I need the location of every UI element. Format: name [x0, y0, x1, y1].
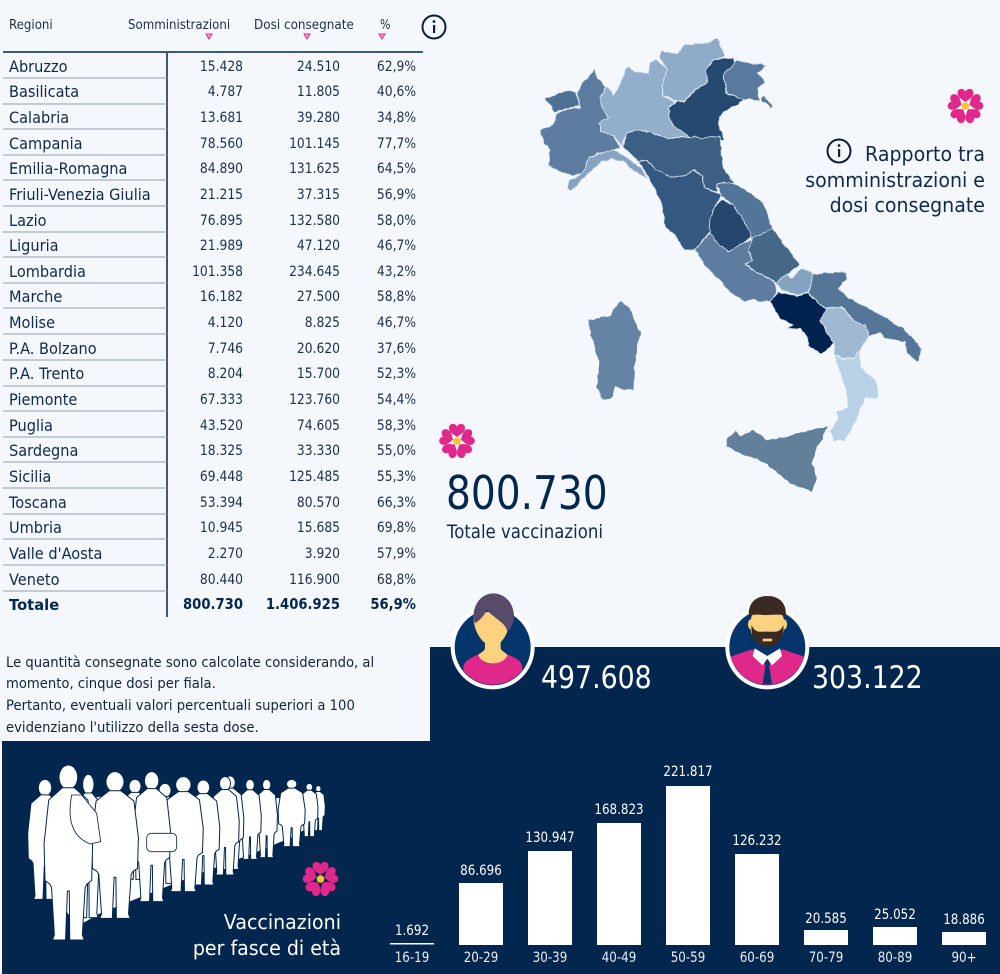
region: Umbria — [709, 200, 752, 252]
table row: Sardegna — [3, 441, 416, 462]
region: Veneto — [668, 57, 745, 140]
bar chart: vaccinations by age — [390, 764, 986, 966]
region: Lazio — [695, 233, 777, 302]
bar: 30-39: 130.947 — [525, 830, 575, 846]
map caption — [805, 140, 985, 217]
bar: 30-39: 30-39 — [533, 950, 567, 966]
map caption: Rapporto tra — [865, 142, 985, 166]
table row: Molise: 8.825 — [305, 315, 340, 331]
table row: P.A. Bolzano: 20.620 — [297, 341, 340, 357]
table row: Sardegna: 33.330 — [297, 443, 340, 459]
table row: Veneto: 80.440 — [200, 572, 243, 588]
bar: 80-89: 80-89 — [878, 950, 912, 966]
region: Piemonte — [539, 68, 620, 175]
bar: 16-19: 1.692 — [395, 923, 429, 939]
bar: 80-89: 25.052 — [874, 907, 916, 923]
region: Valle d'Aosta — [544, 91, 579, 113]
table row: Umbria: 10.945 — [200, 520, 243, 536]
table row: Campania — [3, 134, 416, 155]
table row: Lazio: Lazio — [9, 211, 47, 230]
table row: Calabria: 34,8% — [377, 110, 416, 126]
region: Toscana — [638, 161, 722, 250]
table row: Emilia-Romagna: 64,5% — [377, 161, 416, 177]
table row: Veneto: Veneto — [9, 570, 60, 589]
table row: Marche: 27.500 — [297, 289, 340, 305]
table row: Sicilia — [3, 467, 416, 488]
bar: 70-79: 20.585 — [805, 911, 847, 927]
total vaccinations: Totale vaccinazioni — [446, 522, 603, 543]
illustration: queue of people — [28, 765, 325, 940]
region: Trieste — [761, 97, 773, 107]
table row: Toscana: 66,3% — [377, 495, 416, 511]
table row: Sicilia: 125.485 — [289, 469, 340, 485]
table row: Molise — [3, 313, 416, 334]
table header — [3, 16, 423, 617]
table row: P.A. Bolzano: 7.746 — [208, 341, 243, 357]
bar: 90+: 90+ — [951, 950, 977, 966]
region: Calabria — [830, 350, 878, 441]
region: Sicilia — [727, 427, 828, 492]
table header: % — [380, 17, 390, 32]
bar: 70-79: 70-79 — [809, 950, 843, 966]
bar: 20-29: 20-29 — [464, 950, 498, 966]
bar: 70-79 — [804, 911, 848, 966]
table row: Piemonte: 67.333 — [200, 392, 243, 408]
age panel title: per fasce di età — [193, 937, 341, 960]
table row: Piemonte: 54,4% — [377, 392, 416, 408]
northern and central regions — [539, 38, 773, 252]
table row: Basilicata — [3, 82, 416, 104]
table row: Veneto: 68,8% — [377, 572, 416, 588]
table header: Somministrazioni — [128, 16, 230, 32]
table row: Sardegna: Sardegna — [9, 441, 78, 460]
region: Marche — [717, 182, 773, 238]
table row: Sicilia: Sicilia — [9, 467, 51, 486]
map of Italy — [539, 38, 922, 492]
table row: P.A. Trento: 52,3% — [377, 366, 416, 382]
table row: Valle d'Aosta: 2.270 — [208, 546, 243, 562]
region: Trentino-Alto Adige — [660, 38, 725, 102]
table row: Sardegna: 55,0% — [377, 443, 416, 459]
table row: Toscana: Toscana — [8, 493, 67, 512]
navy background band — [2, 647, 1000, 974]
table row: Puglia — [3, 416, 416, 437]
table row: Abruzzo: Abruzzo — [9, 57, 68, 76]
note text — [6, 654, 374, 736]
bar: 20-29: 86.696 — [460, 863, 502, 879]
icon: info — [422, 16, 446, 38]
table row: Abruzzo: 15.428 — [200, 59, 243, 75]
table row: Lombardia: Lombardia — [9, 262, 86, 281]
note text: Le quantità consegnate sono calcolate considerando, al — [6, 654, 374, 671]
icon: info — [828, 140, 850, 162]
table row: Liguria: 46,7% — [377, 238, 416, 254]
table row: Toscana — [3, 493, 416, 514]
bar: 40-49: 168.823 — [594, 802, 644, 818]
table row: Basilicata: 11.805 — [297, 84, 340, 100]
table row: Valle d'Aosta: Valle d'Aosta — [9, 544, 102, 563]
region: Lombardia — [599, 60, 690, 147]
bar: 60-69: 60-69 — [740, 950, 774, 966]
table row: Lazio: 58,0% — [377, 213, 416, 229]
region: Basilicata — [820, 307, 868, 358]
table row: Molise: 4.120 — [208, 315, 243, 331]
table row: Emilia-Romagna: 84.890 — [200, 161, 243, 177]
bar: 50-59: 221.817 — [663, 764, 713, 780]
table row: Calabria — [3, 108, 416, 129]
table row: Marche: Marche — [9, 287, 62, 306]
table row: Sicilia: 55,3% — [377, 469, 416, 485]
note text: Pertanto, eventuali valori percentuali superiori a 100 — [6, 697, 355, 714]
bar: 40-49: 40-49 — [602, 950, 636, 966]
note text: evidenziano l'utilizzo della sesta dose. — [6, 719, 259, 736]
table row: Lombardia — [3, 262, 416, 283]
table row: Campania: 77,7% — [377, 136, 416, 152]
bar: 90+: 18.886 — [943, 912, 985, 928]
table row: Puglia: 74.605 — [297, 418, 340, 434]
woman count: 497.608 — [541, 659, 652, 696]
table row: Calabria: 13.681 — [200, 110, 243, 126]
region: Abruzzo — [745, 229, 800, 282]
table row: Umbria — [3, 518, 416, 539]
bar: 16-19 — [390, 923, 434, 966]
table row: Veneto — [3, 570, 416, 591]
table row: Campania: 78.560 — [200, 136, 243, 152]
bar: 20-29 — [459, 863, 503, 966]
man avatar — [725, 596, 809, 689]
icon: flower top right — [947, 89, 984, 125]
bar: 60-69: 126.232 — [732, 833, 782, 849]
table row: Totale: Totale — [9, 596, 59, 614]
region: Molise — [777, 267, 813, 295]
man count: 303.122 — [812, 659, 923, 696]
region: Campania — [770, 292, 833, 354]
table row: Friuli-Venezia Giulia: 56,9% — [377, 187, 416, 203]
table row: Liguria — [3, 236, 416, 257]
table row: Basilicata: Basilicata — [9, 82, 79, 101]
map caption: somministrazioni e — [805, 168, 985, 192]
table row: Abruzzo: 62,9% — [377, 59, 416, 75]
table row: Puglia: Puglia — [9, 416, 53, 435]
table row: Friuli-Venezia Giulia: Friuli-Venezia Giulia — [9, 185, 151, 204]
table row: P.A. Bolzano: 37,6% — [377, 341, 416, 357]
table row: Valle d'Aosta: 57,9% — [377, 546, 416, 562]
table row: Friuli-Venezia Giulia: 37.315 — [297, 187, 340, 203]
table row: Lombardia: 43,2% — [377, 264, 416, 280]
table row: Friuli-Venezia Giulia: 21.215 — [200, 187, 243, 203]
bar: 16-19: 16-19 — [395, 950, 429, 966]
table row: Friuli-Venezia Giulia — [3, 185, 416, 206]
table row: Umbria: 69,8% — [377, 520, 416, 536]
region: Liguria — [567, 149, 648, 190]
table row: P.A. Bolzano — [3, 339, 416, 360]
table header: Regioni — [9, 16, 53, 32]
table row: Lazio: 132.580 — [289, 213, 340, 229]
table row: P.A. Bolzano: P.A. Bolzano — [9, 339, 97, 358]
table row: Marche: 58,8% — [377, 289, 416, 305]
table row: Totale: 800.730 — [183, 596, 243, 613]
table row: Lombardia: 234.645 — [289, 264, 340, 280]
data table — [3, 16, 446, 617]
table row: Piemonte — [3, 390, 416, 411]
table row: Umbria: Umbria — [9, 518, 62, 537]
table row: Calabria: 39.280 — [297, 110, 340, 126]
table row: Totale: 1.406.925 — [266, 596, 340, 613]
table row: Calabria: Calabria — [9, 108, 69, 127]
table row: Sicilia: 69.448 — [200, 469, 243, 485]
bar: 50-59 — [663, 764, 713, 966]
bar: 40-49 — [594, 802, 644, 966]
table row: Veneto: 116.900 — [289, 572, 340, 588]
table row: Lazio — [3, 211, 416, 232]
region: Sardegna — [588, 302, 640, 400]
age panel title — [193, 911, 341, 960]
table row: Molise: 46,7% — [377, 315, 416, 331]
region: Friuli-Venezia Giulia — [723, 61, 767, 102]
table row: Molise: Molise — [9, 313, 55, 332]
bar: 30-39 — [525, 830, 575, 966]
table row: Emilia-Romagna: Emilia-Romagna — [9, 159, 127, 178]
table row: Abruzzo: 24.510 — [297, 59, 340, 75]
table row: Toscana: 80.570 — [297, 495, 340, 511]
bar: 50-59: 50-59 — [671, 950, 705, 966]
table header: Dosi consegnate — [254, 17, 354, 32]
table row: Liguria: 21.989 — [200, 238, 243, 254]
table row: Toscana: 53.394 — [200, 495, 243, 511]
table row: Emilia-Romagna — [3, 159, 416, 180]
table row: Totale — [9, 596, 416, 614]
table row: P.A. Trento: 8.204 — [208, 366, 243, 382]
table row: Sardegna: 18.325 — [200, 443, 243, 459]
table row: P.A. Trento: 15.700 — [297, 366, 340, 382]
table row: Totale: 56,9% — [370, 596, 416, 613]
table row: Puglia: 58,3% — [377, 418, 416, 434]
table row: Valle d'Aosta: 3.920 — [305, 546, 340, 562]
woman avatar — [451, 593, 535, 689]
table row: P.A. Trento: P.A. Trento — [9, 364, 84, 383]
total vaccinations: 800.730 — [446, 467, 608, 521]
table row: Abruzzo — [3, 57, 416, 78]
table row: Campania: 101.145 — [289, 136, 340, 152]
table row: Valle d'Aosta — [3, 544, 416, 565]
icon: flower in age panel — [302, 862, 339, 898]
table row: Marche: 16.182 — [200, 289, 243, 305]
table row: Campania: Campania — [9, 134, 83, 153]
table row: Piemonte: 123.760 — [289, 392, 340, 408]
table row: Puglia: 43.520 — [200, 418, 243, 434]
bar: 80-89 — [873, 907, 917, 966]
bar: 90+ — [942, 912, 986, 966]
table row: Basilicata: 40,6% — [377, 84, 416, 100]
map caption: dosi consegnate — [830, 193, 985, 217]
table row: Piemonte: Piemonte — [9, 390, 77, 409]
note text: momento, cinque dosi per fiala. — [6, 675, 216, 692]
table row: Lazio: 76.895 — [200, 213, 243, 229]
table row: Lombardia: 101.358 — [192, 264, 243, 280]
southern regions — [588, 267, 922, 492]
age panel title: Vaccinazioni — [224, 911, 341, 934]
table row: Emilia-Romagna: 131.625 — [289, 161, 340, 177]
region: Emilia-Romagna — [623, 130, 735, 192]
region: Puglia — [808, 272, 922, 363]
table row: Marche — [3, 287, 416, 308]
bar: 60-69 — [732, 833, 782, 966]
icon: flower beside total — [438, 424, 476, 460]
table row: Basilicata: 4.787 — [208, 84, 243, 100]
table row: Liguria: 47.120 — [297, 238, 340, 254]
table row: P.A. Trento — [3, 364, 416, 386]
table row: Liguria: Liguria — [9, 236, 59, 255]
table row: Umbria: 15.685 — [297, 520, 340, 536]
